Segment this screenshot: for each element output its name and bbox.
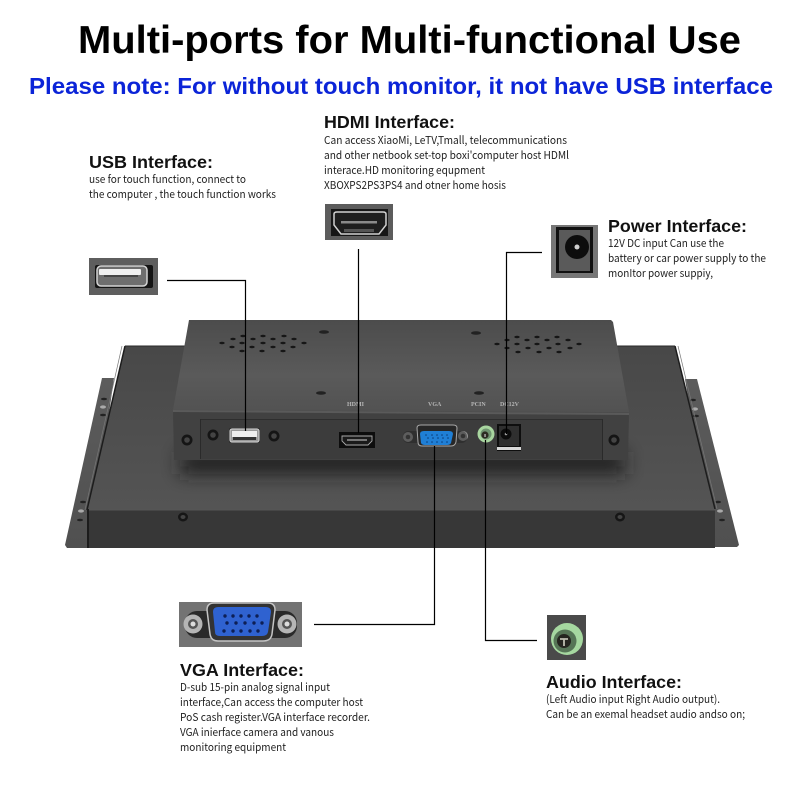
VGA interface text: monitoring equipment (180, 739, 286, 755)
USB port (229, 428, 260, 443)
VGA interface text: D-sub 15-pin analog signal input (180, 679, 330, 695)
VGA interface text (180, 660, 370, 755)
DC power port (497, 424, 521, 451)
audio interface text: Audio Interface: (546, 672, 682, 692)
audio interface text: (Left Audio input Right Audio output). (546, 691, 720, 707)
monitor product photo (65, 320, 739, 548)
icon: VGA connector (179, 602, 302, 647)
rear panel back plate (85, 346, 717, 510)
power connector line (506, 252, 542, 434)
USB interface text: use for touch function, connect to (89, 171, 246, 187)
HDMI port (339, 432, 375, 448)
port labels on case: DC12V (500, 402, 520, 408)
icon: audio connector (547, 615, 586, 660)
control box front face (173, 410, 629, 460)
HDMI interface text (324, 112, 569, 193)
left speaker holes (219, 335, 307, 352)
audio connector line (486, 440, 537, 640)
VGA interface text: VGA Interface: (180, 660, 304, 680)
left mounting flange (65, 378, 114, 548)
VGA interface text: VGA inierface camera and vanous (180, 724, 334, 740)
VGA connector line (314, 446, 434, 624)
title: Multi-ports for Multi-functional Use (78, 19, 741, 62)
rear panel front edge (87, 509, 715, 548)
right speaker holes (494, 336, 582, 353)
audio interface text (546, 672, 745, 722)
VGA interface text: PoS cash register.VGA interface recorder. (180, 709, 370, 725)
power interface text: monItor power suppiy, (608, 265, 713, 281)
USB interface text (89, 152, 276, 202)
icon: DC power connector (551, 225, 598, 278)
power interface text: 12V DC input Can use the (608, 235, 724, 251)
HDMI interface text: HDMI Interface: (324, 112, 455, 132)
HDMI connector line (358, 249, 360, 433)
port labels on case: HDMI (347, 402, 365, 408)
note about touch monitor: Please note: For without touch monitor, it not have USB interface (29, 73, 773, 99)
icon: USB connector (89, 258, 158, 295)
icon: HDMI connector (325, 204, 393, 240)
HDMI interface text: and other netbook set-top boxi'computer host HDMl (324, 147, 569, 163)
USB connector line (167, 280, 246, 431)
VGA port (403, 425, 468, 446)
VGA interface text: interface,Can access the computer host (180, 694, 363, 710)
power interface text (608, 216, 766, 281)
case screws (182, 430, 620, 446)
port labels on case (347, 402, 520, 408)
power interface text: battery or car power supply to the (608, 250, 766, 266)
port labels on case: VGA (428, 402, 442, 408)
audio interface text: Can be an exemal headset audio andso on; (546, 706, 745, 722)
USB interface text: the computer , the touch function works (89, 186, 276, 202)
right mounting flange (685, 379, 739, 547)
HDMI interface text: XBOXPS2PS3PS4 and otner home hosis (324, 177, 506, 193)
port labels on case: PCIN (471, 402, 486, 408)
power interface text: Power Interface: (608, 216, 747, 236)
USB interface text: USB Interface: (89, 152, 213, 172)
HDMI interface text: interace.HD monitoring equpment (324, 162, 485, 178)
control box top face (173, 320, 629, 412)
audio port (478, 426, 494, 442)
HDMI interface text: Can access XiaoMi, LeTV,Tmall, telecommunications (324, 132, 567, 148)
